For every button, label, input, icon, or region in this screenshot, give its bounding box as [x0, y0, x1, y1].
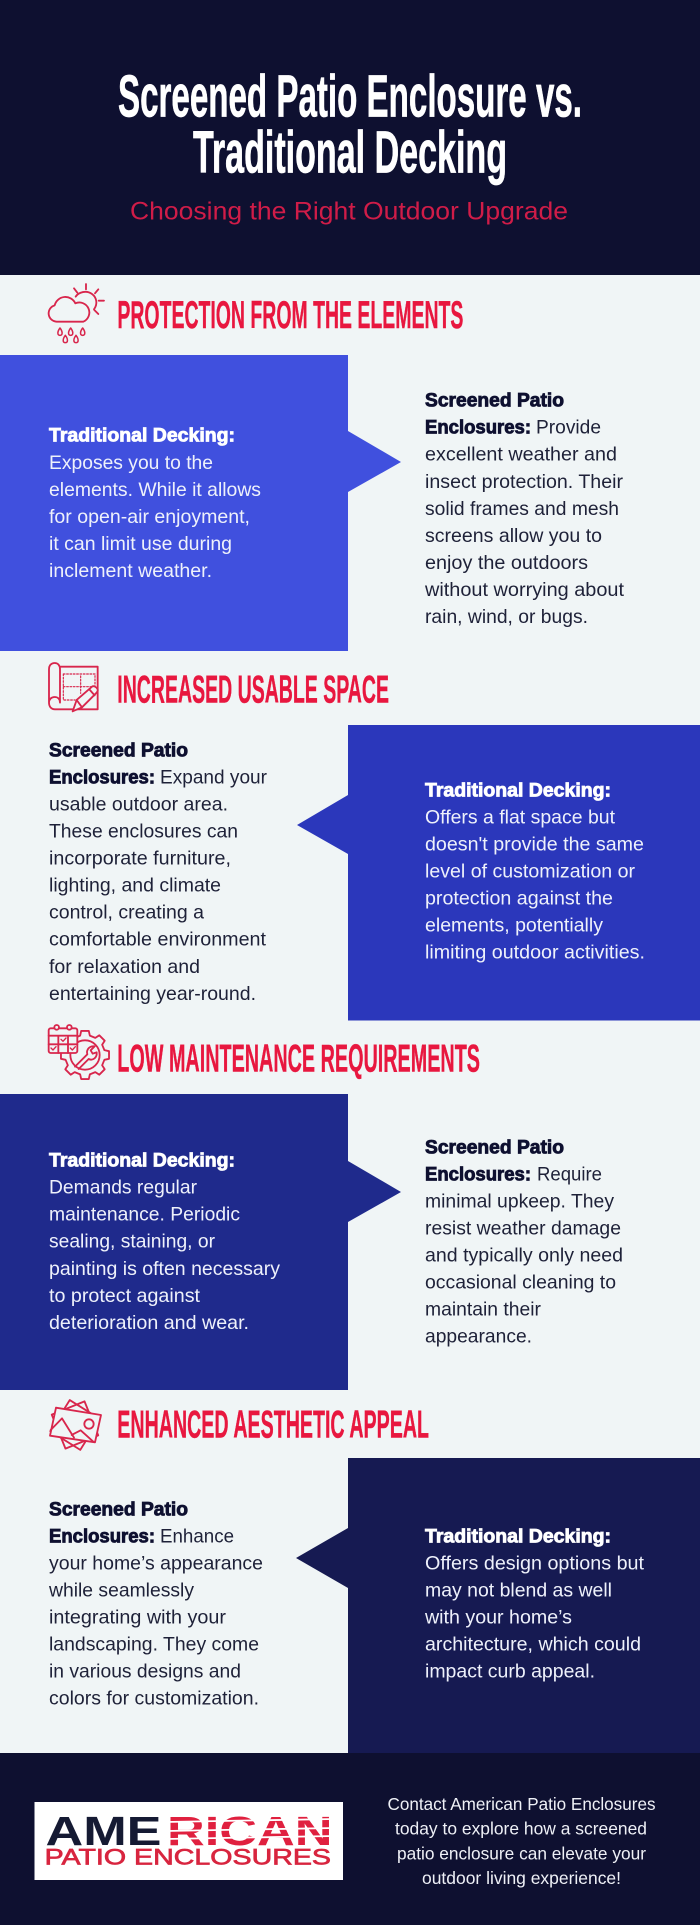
text: screened patio enclosures: colors for customization.: [49, 1688, 259, 1710]
text: traditional decking: Traditional Decking:: [425, 780, 611, 802]
text: screened patio enclosures: Screened Patio: [425, 1137, 564, 1159]
text: traditional decking: architecture, which could: [425, 1634, 641, 1656]
text: screened patio enclosures: [425, 1137, 623, 1348]
text: screened patio enclosures: incorporate furniture,: [49, 848, 231, 870]
logo: American Patio Enclosures: PATIO ENCLOSURES: [45, 1845, 331, 1870]
text: screened patio enclosures: insect protection. Their: [425, 471, 624, 493]
text: traditional decking: inclement weather.: [49, 560, 212, 582]
text: screened patio enclosures: Enclosures:: [425, 417, 531, 439]
text: screened patio enclosures: comfortable environment: [49, 929, 267, 951]
text: screened patio enclosures: usable outdoor area.: [49, 794, 228, 816]
text: traditional decking: [49, 1150, 280, 1334]
text: screened patio enclosures: while seamlessly: [48, 1580, 194, 1602]
text: traditional decking: for open-air enjoyment,: [49, 506, 250, 528]
text: screened patio enclosures: Expand your: [160, 767, 267, 789]
icon: cloud, sun and rain: [49, 284, 104, 343]
call to action text: patio enclosure can elevate your: [397, 1843, 646, 1863]
text: traditional decking: elements. While it allows: [49, 479, 261, 501]
logo: American Patio Enclosures: [34, 1802, 343, 1880]
text: screened patio enclosures: maintain their: [425, 1299, 541, 1321]
text: screened patio enclosures: minimal upkeep. They: [425, 1191, 614, 1213]
text: traditional decking: Traditional Decking:: [49, 1150, 235, 1172]
text: screened patio enclosures: Enclosures:: [425, 1164, 531, 1186]
text: traditional decking: Demands regular: [49, 1177, 197, 1199]
text: screened patio enclosures: resist weather damage: [425, 1218, 621, 1240]
text: traditional decking: [425, 780, 645, 964]
text: traditional decking: protection against the: [425, 888, 613, 910]
text: screened patio enclosures: entertaining year-round.: [49, 983, 256, 1005]
text: traditional decking: may not blend as well: [425, 1580, 612, 1602]
text: screened patio enclosures: appearance.: [425, 1326, 532, 1348]
text: screened patio enclosures: Screened Patio: [49, 1499, 188, 1521]
logo: American Patio Enclosures: RICAN: [167, 1808, 332, 1854]
call to action text: [388, 1794, 656, 1888]
text: screened patio enclosures: Enhance: [160, 1526, 234, 1548]
heading: INCREASED USABLE SPACE: [117, 668, 389, 711]
panel: traditional decking: [0, 355, 401, 651]
icon: calendar and gear with wrench: [49, 1025, 109, 1079]
text: screened patio enclosures: lighting, and climate: [49, 875, 221, 897]
section: protection from the elements: [0, 284, 625, 651]
text: screened patio enclosures: landscaping. They come: [49, 1634, 259, 1656]
text: traditional decking: Exposes you to the: [49, 452, 213, 474]
text: screened patio enclosures: Require: [537, 1164, 602, 1186]
text: screened patio enclosures: Provide: [536, 417, 601, 439]
title: [118, 64, 582, 186]
text: screened patio enclosures: control, creating a: [49, 902, 204, 924]
text: traditional decking: to protect against: [49, 1285, 201, 1307]
text: traditional decking: level of customization or: [425, 861, 635, 883]
panel: traditional decking: [296, 1458, 700, 1753]
icon: blueprint and pencil: [49, 663, 98, 711]
text: traditional decking: limiting outdoor activities.: [425, 942, 645, 964]
section: low maintenance requirements: [0, 1025, 623, 1390]
text: screened patio enclosures: excellent weather and: [425, 444, 617, 466]
text: screened patio enclosures: rain, wind, or bugs.: [425, 606, 588, 628]
icon: stacked photos: [50, 1400, 101, 1450]
text: screened patio enclosures: your home’s appearance: [49, 1553, 263, 1575]
section: enhanced aesthetic appeal: [48, 1400, 700, 1753]
text: traditional decking: impact curb appeal.: [425, 1661, 595, 1683]
text: screened patio enclosures: enjoy the outdoors: [425, 552, 588, 574]
text: screened patio enclosures: without worrying about: [424, 579, 625, 601]
text: traditional decking: painting is often necessary: [49, 1258, 280, 1280]
text: screened patio enclosures: Enclosures:: [49, 767, 155, 789]
text: traditional decking: deterioration and wear.: [49, 1312, 249, 1334]
text: screened patio enclosures: screens allow you to: [425, 525, 602, 547]
text: screened patio enclosures: [424, 390, 625, 628]
call to action text: today to explore how a screened: [395, 1819, 647, 1839]
text: traditional decking: Traditional Decking:: [425, 1526, 611, 1548]
subtitle: Choosing the Right Outdoor Upgrade: [130, 198, 568, 226]
text: screened patio enclosures: Screened Patio: [49, 740, 188, 762]
text: screened patio enclosures: for relaxation and: [49, 956, 200, 978]
panel: traditional decking: [297, 725, 700, 1020]
call to action text: outdoor living experience!: [422, 1868, 621, 1888]
text: traditional decking: elements, potentially: [425, 915, 603, 937]
text: traditional decking: [49, 425, 261, 582]
panel: traditional decking: [0, 1094, 401, 1390]
text: traditional decking: Traditional Decking:: [49, 425, 235, 447]
footer panel: [0, 1753, 700, 1925]
text: screened patio enclosures: and typically only need: [425, 1245, 623, 1267]
text: traditional decking: [424, 1526, 645, 1683]
text: traditional decking: with your home’s: [424, 1607, 572, 1629]
text: screened patio enclosures: Enclosures:: [49, 1526, 155, 1548]
text: screened patio enclosures: [48, 1499, 263, 1710]
text: traditional decking: sealing, staining, or: [49, 1231, 215, 1253]
text: screened patio enclosures: integrating with your: [49, 1607, 227, 1629]
text: screened patio enclosures: in various designs and: [49, 1661, 241, 1683]
header panel: [0, 0, 700, 275]
logo: American Patio Enclosures: AME: [46, 1808, 162, 1854]
call to action text: Contact American Patio Enclosures: [388, 1794, 656, 1814]
text: screened patio enclosures: [49, 740, 267, 1005]
text: screened patio enclosures: These enclosures can: [49, 821, 238, 843]
text: traditional decking: Offers a flat space but: [425, 807, 616, 829]
text: traditional decking: Offers design options but: [425, 1553, 645, 1575]
text: screened patio enclosures: occasional cleaning to: [425, 1272, 616, 1294]
text: traditional decking: maintenance. Periodic: [49, 1204, 240, 1226]
text: traditional decking: doesn't provide the same: [425, 834, 644, 856]
text: screened patio enclosures: Screened Patio: [425, 390, 564, 412]
text: screened patio enclosures: solid frames and mesh: [425, 498, 619, 520]
text: traditional decking: it can limit use during: [49, 533, 232, 555]
section: increased usable space: [49, 663, 700, 1020]
